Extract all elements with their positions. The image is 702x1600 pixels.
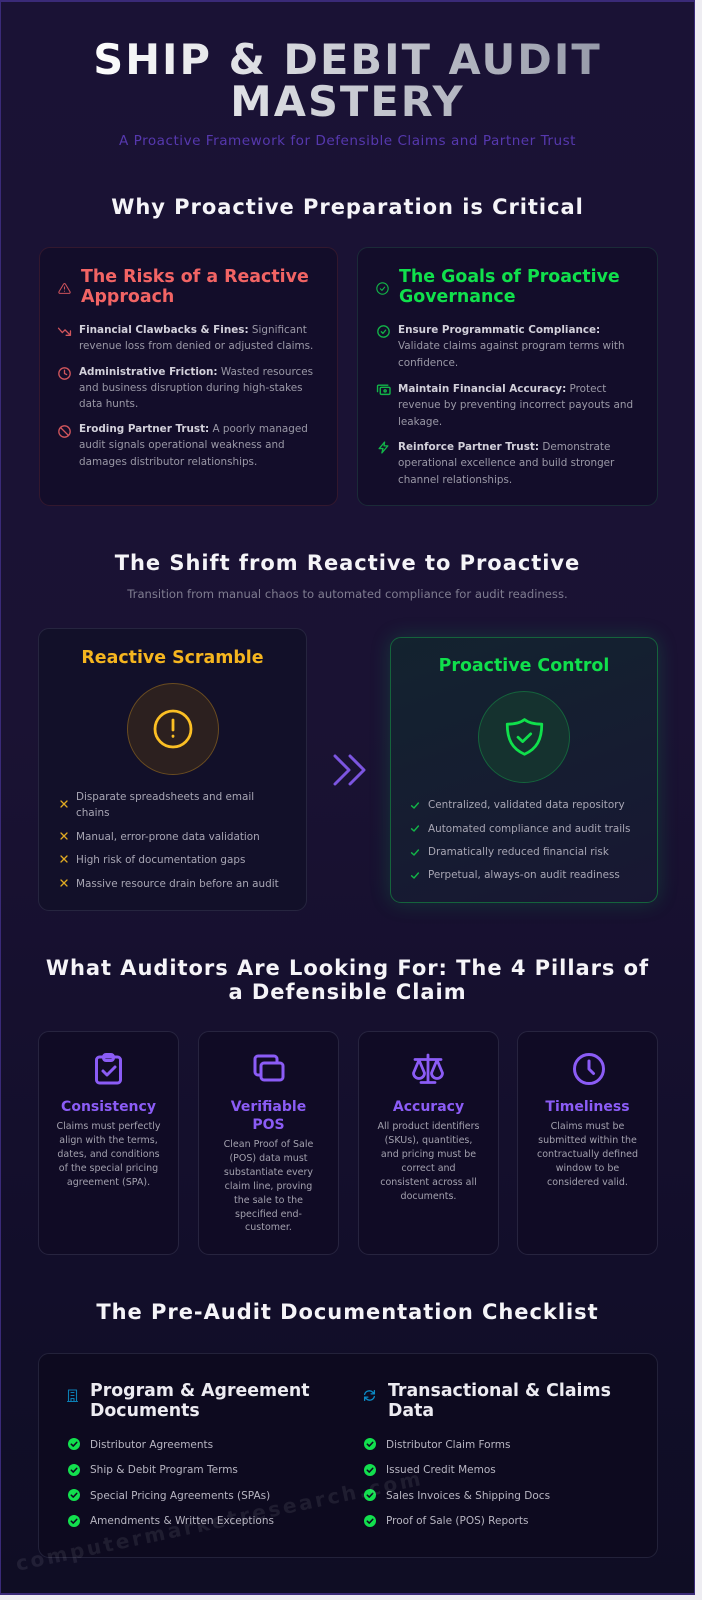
- watermark: computermarketresearch.com: [14, 1466, 425, 1576]
- icon: warning triangle: [58, 283, 71, 294]
- heading: the shift: The Shift from Reactive to Proactive: [115, 551, 580, 575]
- timeliness title: Timeliness: [545, 1099, 630, 1115]
- verifiable text: (POS) data must: [229, 1153, 308, 1164]
- documents heading: Program & Agreement: [90, 1381, 310, 1401]
- timeliness text: submitted within the: [538, 1135, 637, 1146]
- panel: goals: [357, 247, 658, 506]
- risk: friction: [79, 366, 313, 410]
- verifiable text: [224, 1139, 313, 1233]
- goal: trust: Reinforce Partner Trust: Demonstrate: [398, 441, 610, 453]
- documents list: Special Pricing Agreements (SPAs): [90, 1490, 270, 1502]
- icon: alert circle: [126, 683, 218, 775]
- accuracy text: All product identifiers: [378, 1121, 479, 1132]
- list item: reduced risk: [410, 846, 609, 858]
- risk: trust: Eroding Partner Trust: A poorly managed: [79, 423, 308, 435]
- transactional heading: [388, 1381, 611, 1422]
- icon: building: [67, 1390, 78, 1402]
- icon: check circle: [376, 282, 389, 295]
- item: amendments: [38, 1353, 40, 1355]
- pillar: accuracy: [358, 1031, 499, 1255]
- list item: automated: [410, 822, 630, 834]
- goals heading: [399, 266, 620, 307]
- risk: clawbacks: Financial Clawbacks & Fines: Significant: [79, 324, 307, 336]
- verifiable title: Verifiable: [231, 1099, 306, 1115]
- list item: gaps: [60, 854, 245, 866]
- goal: accuracy: leakage.: [398, 416, 442, 428]
- transactional heading: Data: [388, 1401, 434, 1421]
- consistency text: [56, 1121, 161, 1188]
- item: invoices: [348, 1353, 350, 1355]
- item: distributor agreements: [38, 1353, 40, 1355]
- heading: why proactive: Why Proactive Preparation is Critical: [111, 195, 584, 219]
- risk: trust: damages distributor relationships.: [79, 456, 257, 468]
- consistency text: dates, and conditions: [57, 1149, 160, 1160]
- accuracy title: Accuracy: [393, 1099, 464, 1115]
- icon: scales: [412, 1054, 444, 1084]
- icon: cash: [376, 384, 391, 396]
- icon: clock: [573, 1053, 605, 1085]
- timeliness text: window to be: [556, 1163, 619, 1174]
- accuracy text: correct and: [401, 1163, 456, 1174]
- item: credit memos: [348, 1353, 350, 1355]
- reactive list: chains: [76, 807, 110, 819]
- heading: four pillars: What Auditors Are Looking For: The 4 Pillars of: [46, 956, 649, 980]
- panel: checklist: [38, 1353, 658, 1558]
- transactional list: Proof of Sale (POS) Reports: [386, 1515, 528, 1527]
- consistency text: align with the terms,: [59, 1135, 158, 1146]
- goal: compliance: Validate claims against program terms with: [398, 340, 625, 352]
- pillar: timeliness: [517, 1031, 658, 1255]
- goal: trust: operational excellence and build stronger: [398, 457, 614, 469]
- proactive list: Perpetual, always-on audit readiness: [428, 869, 620, 881]
- proactive list: Centralized, validated data repository: [428, 799, 625, 811]
- documents list: [68, 1438, 274, 1527]
- list item: perpetual: [410, 869, 620, 881]
- item: pos reports: [348, 1353, 350, 1355]
- item: spas: [38, 1353, 40, 1355]
- consistency text: agreement (SPA).: [67, 1177, 150, 1188]
- goal: accuracy: [398, 383, 633, 428]
- accuracy text: documents.: [401, 1191, 456, 1202]
- list item: centralized: [410, 799, 625, 811]
- documents heading: Documents: [90, 1401, 200, 1421]
- list item: drain: [60, 878, 279, 890]
- goals heading: Governance: [399, 287, 516, 307]
- documents heading: [90, 1381, 310, 1421]
- accuracy text: [378, 1121, 479, 1202]
- icon: shield check: [478, 691, 570, 783]
- item: claim forms: [348, 1353, 350, 1355]
- verifiable title: POS: [252, 1117, 285, 1133]
- goal: compliance: confidence.: [398, 357, 458, 369]
- icon: clipboard check: [95, 1053, 122, 1084]
- proactive list: Dramatically reduced financial risk: [428, 846, 609, 858]
- transactional list: Sales Invoices & Shipping Docs: [386, 1490, 550, 1502]
- icon: ban: [58, 425, 71, 438]
- risks heading: Approach: [81, 287, 174, 307]
- icon: check circle: [377, 325, 390, 338]
- item: program terms: [38, 1353, 40, 1355]
- documents list: Distributor Agreements: [90, 1438, 213, 1450]
- proactive list: [410, 799, 630, 881]
- accuracy text: (SKUs), quantities,: [385, 1135, 472, 1146]
- risks heading: The Risks of a Reactive: [81, 266, 309, 286]
- reactive list: Manual, error-prone data validation: [76, 831, 260, 843]
- section subtitle: Transition from manual chaos to automated compliance for audit readiness.: [127, 587, 568, 601]
- icon: stacked cards: [254, 1054, 284, 1082]
- proactive heading: Proactive Control: [439, 656, 609, 676]
- verifiable text: substantiate every: [224, 1167, 313, 1178]
- reactive list: Disparate spreadsheets and email: [76, 791, 254, 803]
- verifiable title: [230, 1099, 306, 1133]
- verifiable text: specified end-: [235, 1209, 302, 1220]
- accuracy text: consistent across all: [380, 1177, 477, 1188]
- risk: friction: data hunts.: [79, 398, 138, 410]
- transactional list: Distributor Claim Forms: [386, 1438, 510, 1450]
- accuracy text: and pricing must be: [381, 1149, 476, 1160]
- goal: compliance: Ensure Programmatic Compliance:: [398, 324, 600, 336]
- panel: risks: [39, 247, 338, 506]
- proactive list: Automated compliance and audit trails: [428, 822, 630, 834]
- pillar: verifiable pos: [198, 1031, 339, 1255]
- transactional heading: Transactional & Claims: [388, 1381, 611, 1401]
- verifiable text: claim line, proving: [225, 1181, 312, 1192]
- heading: four pillars: a Defensible Claim: [228, 980, 467, 1004]
- timeliness text: considered valid.: [547, 1177, 628, 1188]
- goals heading: The Goals of Proactive: [399, 266, 620, 286]
- panel: reactive scramble: [38, 628, 307, 911]
- verifiable text: customer.: [245, 1222, 292, 1233]
- transactional list: [349, 1354, 649, 1557]
- arrow: double chevron: [333, 754, 366, 786]
- risk: clawbacks: [79, 324, 313, 352]
- consistency text: of the special pricing: [59, 1163, 158, 1174]
- goal: trust: [398, 441, 614, 486]
- documents list: Amendments & Written Exceptions: [90, 1515, 274, 1527]
- icon: trending down: [58, 328, 72, 336]
- panel: proactive control: [390, 637, 658, 903]
- reactive heading: Reactive Scramble: [81, 648, 264, 668]
- reactive list: High risk of documentation gaps: [76, 854, 245, 866]
- risks heading: [81, 266, 309, 307]
- verifiable text: Clean Proof of Sale: [224, 1139, 313, 1150]
- icon: clock: [58, 367, 71, 380]
- verifiable text: the sale to the: [234, 1195, 303, 1206]
- timeliness text: contractually defined: [537, 1149, 638, 1160]
- consistency text: Claims must perfectly: [56, 1121, 161, 1132]
- risk: friction: Administrative Friction: Wasted resources: [79, 366, 313, 378]
- icon: refresh: [363, 1389, 376, 1402]
- risk: friction: and business disruption during high-stakes: [79, 382, 303, 394]
- timeliness text: Claims must be: [551, 1121, 624, 1132]
- goal: accuracy: Maintain Financial Accuracy: Protect: [398, 383, 606, 395]
- heading: checklist: The Pre-Audit Documentation Checklist: [96, 1300, 599, 1324]
- subtitle: A Proactive Framework for Defensible Claims and Partner Trust: [119, 133, 576, 149]
- reactive list: Massive resource drain before an audit: [76, 878, 279, 890]
- goal: compliance: [398, 324, 625, 369]
- goal: trust: channel relationships.: [398, 474, 512, 486]
- heading: four pillars: [46, 956, 649, 1004]
- reactive list: [60, 791, 279, 890]
- list item: spreadsheets: [60, 791, 254, 819]
- title: SHIP & DEBIT AUDIT: [93, 35, 602, 84]
- documents list: Ship & Debit Program Terms: [90, 1464, 238, 1476]
- icon: bolt: [378, 441, 388, 454]
- goal: accuracy: revenue by preventing incorrect payouts and: [398, 399, 633, 411]
- risk: trust: audit signals operational weakness and: [79, 439, 285, 451]
- timeliness text: [537, 1121, 638, 1188]
- pillar: consistency: [38, 1031, 179, 1255]
- title: [1, 39, 694, 122]
- transactional list: Issued Credit Memos: [386, 1464, 496, 1476]
- title: MASTERY: [230, 77, 465, 126]
- risk: clawbacks: revenue loss from denied or adjusted claims.: [79, 340, 313, 352]
- consistency title: Consistency: [61, 1099, 156, 1115]
- risk: trust: [79, 423, 308, 468]
- list item: manual: [60, 831, 260, 843]
